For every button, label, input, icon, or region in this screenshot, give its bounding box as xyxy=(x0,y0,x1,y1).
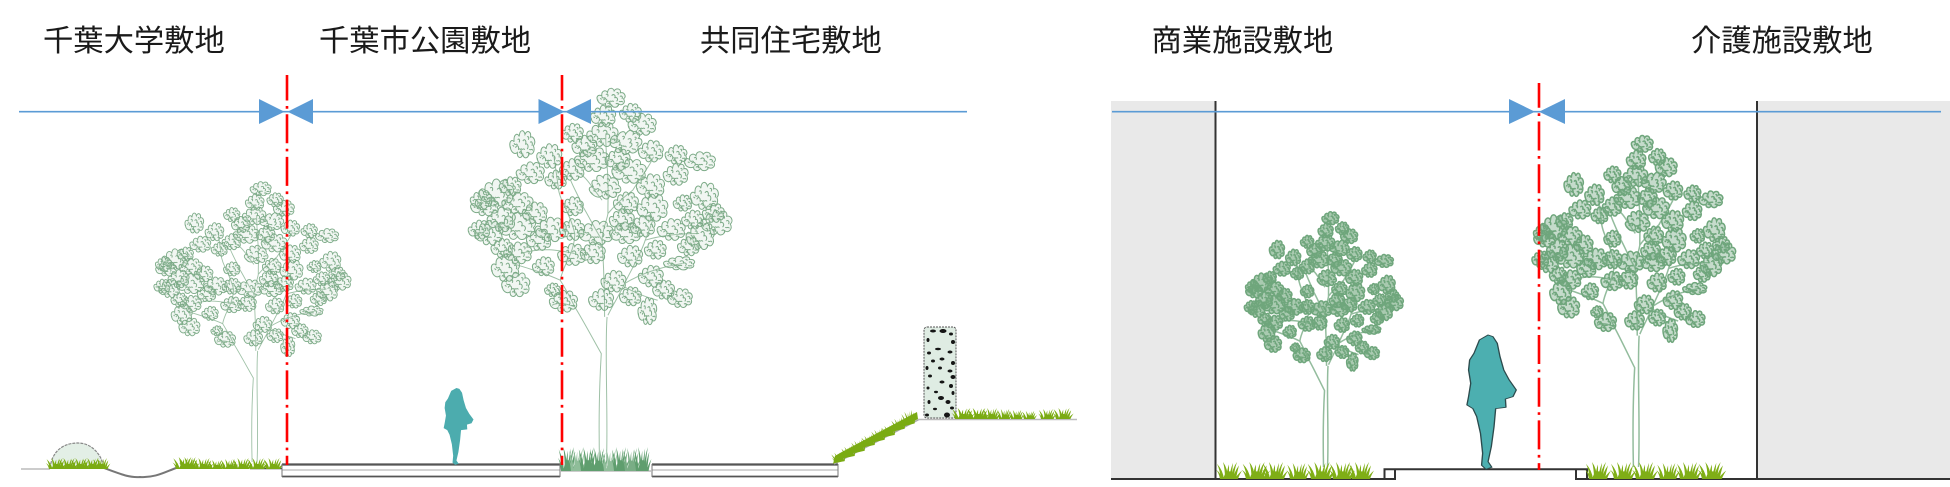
building wall: commercial side xyxy=(1214,101,1216,478)
tree: care facility site xyxy=(1532,135,1736,467)
tree: commercial site xyxy=(1244,212,1403,467)
building wall: care facility side xyxy=(1756,101,1758,478)
pavement: park path xyxy=(282,464,560,477)
person: walkway xyxy=(1467,335,1516,469)
pavement: housing path xyxy=(652,464,838,477)
gabion pillar xyxy=(924,327,956,418)
grey building: care facility side xyxy=(1757,101,1950,478)
heading: 介護施設敷地: 介護施設敷地 xyxy=(1691,24,1873,58)
boundary dimension line: right section xyxy=(1112,111,1941,113)
upper ground line xyxy=(918,418,1077,420)
tree: park and housing boundary xyxy=(468,88,732,467)
red boundary line 1 xyxy=(286,75,288,465)
arrowheads: boundary 3 xyxy=(1509,99,1565,124)
heading: 共同住宅敷地: 共同住宅敷地 xyxy=(700,24,882,58)
mound shrub xyxy=(50,443,104,468)
grass right section left bed xyxy=(1216,462,1374,479)
grey building: commercial side xyxy=(1111,101,1216,478)
heading: 千葉市公園敷地: 千葉市公園敷地 xyxy=(319,24,531,58)
heading: 商業施設敷地: 商業施設敷地 xyxy=(1152,24,1333,58)
boundary dimension line: left section xyxy=(19,111,967,113)
heading: 千葉大学敷地: 千葉大学敷地 xyxy=(43,24,225,58)
arrowheads: boundary 1 xyxy=(259,99,313,124)
person: park path xyxy=(444,388,474,465)
grass right section right bed xyxy=(1585,462,1726,479)
swale xyxy=(104,468,176,477)
grass left strips xyxy=(46,457,284,469)
dark grass at planting strip xyxy=(558,447,652,471)
grass upper terrace xyxy=(951,408,1074,419)
red boundary line 2 xyxy=(561,75,563,465)
arrowheads: boundary 2 xyxy=(538,99,591,124)
left section ground xyxy=(21,443,282,477)
slope with grass xyxy=(831,409,919,464)
tree: university site xyxy=(154,182,351,462)
ground and raised walkway xyxy=(1111,469,1950,479)
red boundary line 3 xyxy=(1538,83,1540,470)
